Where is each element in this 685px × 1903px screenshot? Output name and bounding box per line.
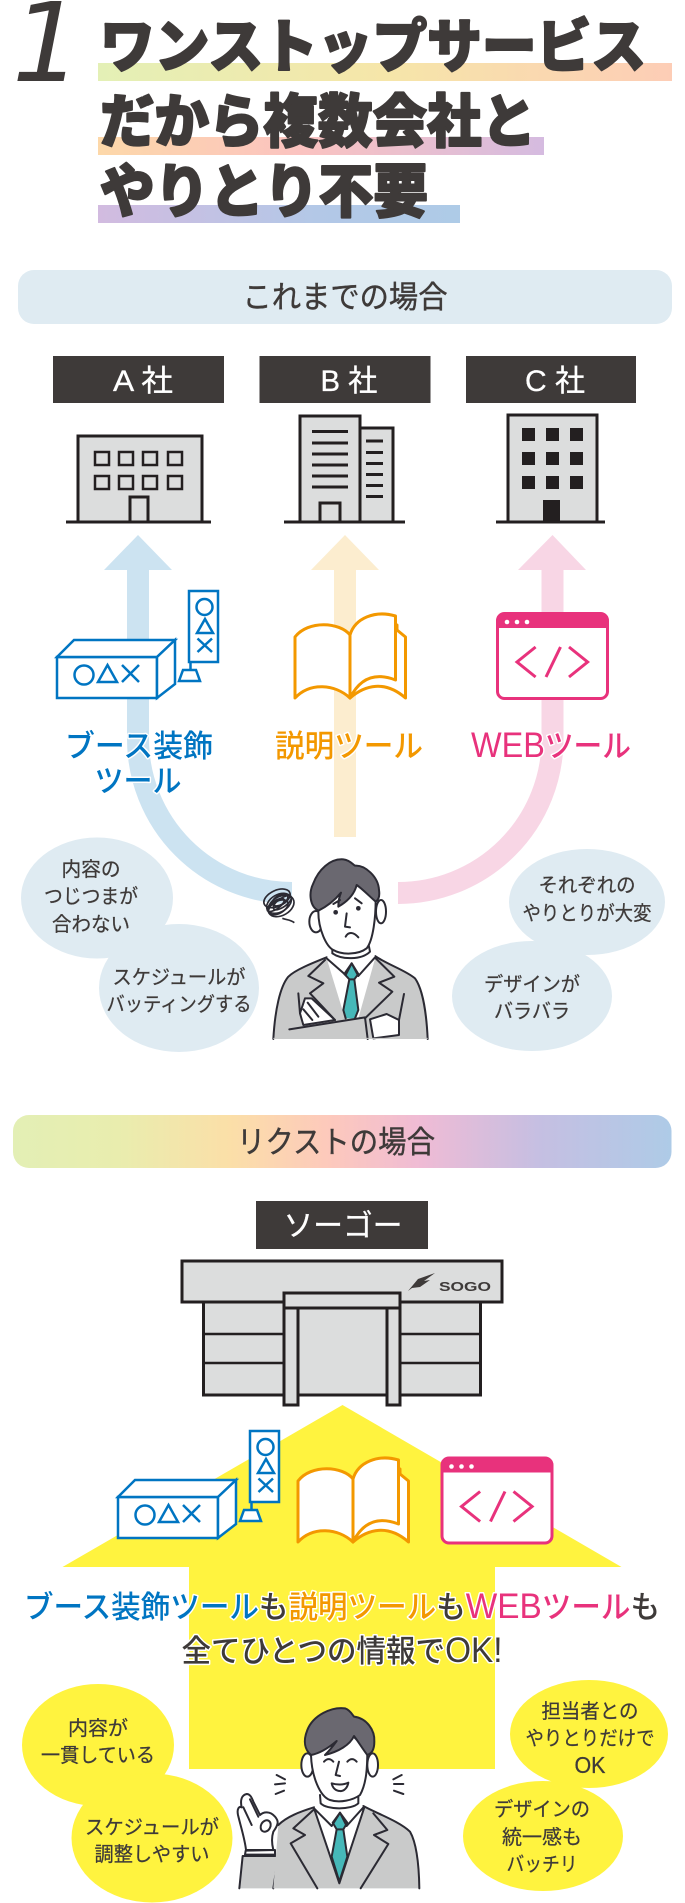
bubble: 内容が一貫している: 一貫している bbox=[41, 1745, 155, 1767]
label: ソーゴー bbox=[256, 1201, 428, 1249]
bubble: スケジュールがバッティングする bbox=[99, 924, 259, 1052]
label: B社: B 社 bbox=[320, 365, 378, 398]
bubble: 内容のつじつまが合わない: つじつまが bbox=[44, 885, 138, 908]
icon: booth bbox=[57, 591, 218, 698]
icon: building A bbox=[66, 436, 211, 522]
tool label: ブース装飾ツール: ブース装飾 bbox=[65, 729, 213, 764]
bubble: デザインがバラバラ: デザインが bbox=[484, 973, 580, 996]
bubble: 内容のつじつまが合わない bbox=[21, 838, 173, 958]
icon: building B bbox=[284, 416, 405, 522]
label: C社: C 社 bbox=[525, 365, 585, 398]
label: A社: A 社 bbox=[113, 365, 173, 398]
arrow: blue curved bbox=[104, 535, 292, 893]
title line 2: だから複数会社と bbox=[100, 90, 536, 155]
message text: ブース装飾ツールも説明ツールもWEBツールも bbox=[24, 1587, 660, 1626]
title line 3: やりとり不要 bbox=[100, 160, 428, 225]
tool label: ブース装飾ツール: ツール bbox=[94, 764, 182, 799]
illustration: troubled businessman bbox=[261, 859, 428, 1039]
bubble: 担当者とのやりとりだけでOK: 担当者との bbox=[542, 1700, 638, 1723]
bubble: 担当者とのやりとりだけでOK bbox=[510, 1680, 668, 1788]
label: ソーゴー: ソーゴー bbox=[284, 1210, 402, 1243]
panel heading: リクストの場合: リクストの場合 bbox=[237, 1125, 435, 1160]
bubble: デザインがバラバラ: バラバラ bbox=[494, 1001, 570, 1023]
icon: book bbox=[295, 614, 406, 698]
bubble: それぞれのやりとりが大変 bbox=[509, 849, 665, 955]
bubble: 担当者とのやりとりだけでOK: やりとりだけで bbox=[526, 1728, 654, 1750]
message text bbox=[24, 1587, 660, 1670]
title line 1: ワンストップサービス bbox=[100, 15, 646, 80]
icon: SOGO building bbox=[182, 1261, 502, 1405]
arrow: pink curved bbox=[398, 535, 586, 893]
tool label: 説明ツール: 説明ツール bbox=[275, 729, 423, 764]
bubble: 内容のつじつまが合わない: 内容の bbox=[62, 858, 120, 881]
bubble: スケジュールがバッティングする: スケジュールが bbox=[112, 966, 246, 989]
arrow: big yellow bbox=[62, 1405, 622, 1769]
tool label: WEBツール: WEBツール bbox=[471, 726, 631, 765]
arrow: orange straight bbox=[311, 535, 379, 837]
logo: SOGO bbox=[408, 1273, 491, 1294]
label: C社 bbox=[466, 356, 636, 403]
tool label: ブース装飾ツール bbox=[65, 729, 213, 799]
bubble: デザインの統一感もバッチリ: デザインの bbox=[494, 1798, 590, 1821]
label: A社 bbox=[53, 356, 224, 403]
bubble: デザインの統一感もバッチリ: バッチリ bbox=[506, 1854, 578, 1876]
bubble: 内容が一貫している: 内容が bbox=[68, 1717, 128, 1740]
panel heading: リクストの場合 bbox=[13, 1115, 672, 1168]
bubble: それぞれのやりとりが大変: それぞれの bbox=[538, 875, 636, 897]
icon: book (filled) bbox=[298, 1458, 408, 1542]
illustration: smiling businessman bbox=[238, 1708, 419, 1888]
icon: browser window (filled) bbox=[442, 1458, 552, 1543]
bubble: デザインがバラバラ bbox=[452, 941, 612, 1051]
bubble: スケジュールがバッティングする: バッティングする bbox=[106, 993, 252, 1016]
bubble: 内容が一貫している bbox=[22, 1684, 174, 1806]
icon: browser window bbox=[497, 613, 608, 698]
title bbox=[98, 15, 672, 225]
bubble: スケジュールが調整しやすい bbox=[72, 1774, 232, 1902]
bubble: デザインの統一感もバッチリ bbox=[463, 1781, 623, 1891]
panel heading: これまでの場合 bbox=[18, 270, 672, 324]
message text: 全てひとつの情報でOK! bbox=[182, 1631, 502, 1670]
label: B社 bbox=[260, 356, 430, 403]
panel heading: これまでの場合: これまでの場合 bbox=[242, 280, 448, 315]
bubble: それぞれのやりとりが大変: やりとりが大変 bbox=[522, 902, 652, 925]
icon: building C bbox=[496, 415, 605, 522]
logo: SOGO: SOGO bbox=[439, 1279, 491, 1294]
bubble: 担当者とのやりとりだけでOK: OK bbox=[574, 1752, 606, 1778]
icon: booth (filled) bbox=[118, 1431, 279, 1538]
bubble: デザインの統一感もバッチリ: 統一感も bbox=[502, 1826, 582, 1849]
bubble: スケジュールが調整しやすい: 調整しやすい bbox=[94, 1843, 210, 1866]
bubble: 内容のつじつまが合わない: 合わない bbox=[52, 913, 130, 936]
bubble: スケジュールが調整しやすい: スケジュールが bbox=[85, 1816, 219, 1839]
